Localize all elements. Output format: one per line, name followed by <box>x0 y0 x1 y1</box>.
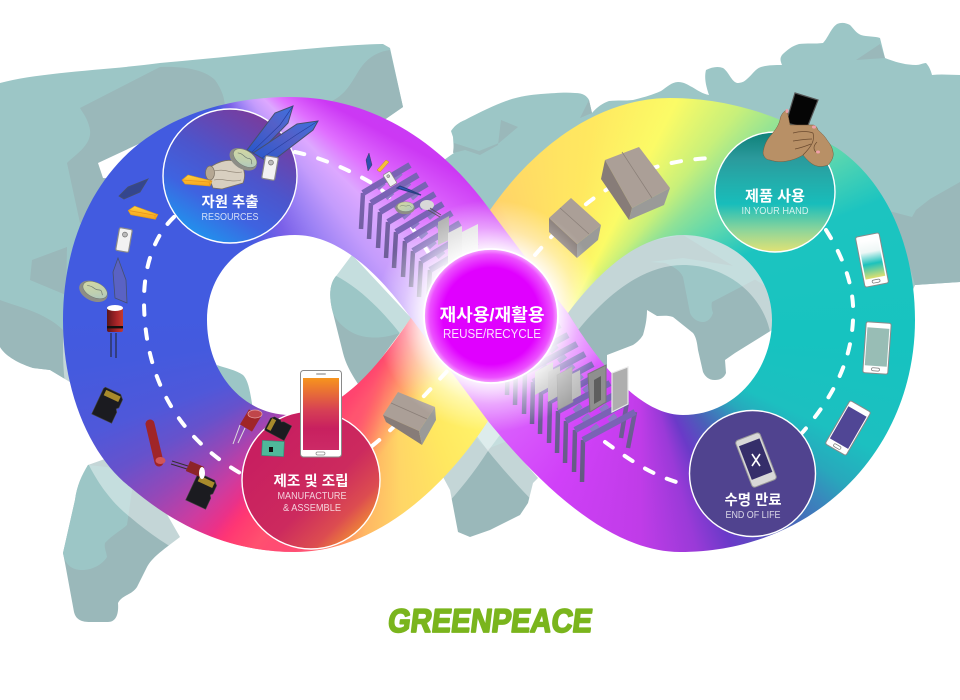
label: manufacture and assemble: MANUFACTURE <box>278 491 347 502</box>
map: asia in right hole <box>568 235 772 380</box>
map: south america <box>63 450 180 622</box>
icon: cardboard box small <box>549 198 601 258</box>
icon: discarded phone <box>735 432 777 488</box>
white glow around hub <box>385 204 596 428</box>
label: in your hand: 제품 사용 <box>745 188 805 205</box>
conveyor: lower recycling line <box>507 325 635 482</box>
icon: phone new on right <box>855 233 889 287</box>
pale band shadow on map <box>63 127 915 582</box>
icon: resources cluster (crystals, rock, log, gold, chip) <box>182 106 318 189</box>
icon: memory cards and parts <box>92 387 292 509</box>
icon: left column raw materials <box>76 179 159 306</box>
map: central america piece in left hole <box>217 255 411 410</box>
panel: end of life circle <box>690 410 816 536</box>
panel: resources circle <box>163 109 297 243</box>
band: upper right strand <box>490 98 915 320</box>
dashed route line <box>144 152 853 485</box>
label: resources: RESOURCES <box>202 212 259 223</box>
map: africa <box>442 421 538 537</box>
label: reuse recycle: REUSE/RECYCLE <box>443 327 541 341</box>
label: end of life: END OF LIFE <box>726 510 781 521</box>
band: upper left strand <box>63 97 526 339</box>
map: eurasia <box>437 23 960 320</box>
band: lower left strand <box>63 318 488 552</box>
icon: phone aged on right <box>863 322 891 374</box>
infinity loop band <box>63 97 915 552</box>
panel: reuse recycle hub <box>424 249 558 383</box>
label: reuse recycle <box>440 305 544 341</box>
panel: manufacture circle <box>242 411 380 549</box>
panel: in your hand circle <box>715 132 835 252</box>
logo: greenpeace: GREENPEACE <box>386 603 595 640</box>
icon: new smartphone <box>300 370 342 457</box>
label: resources <box>202 194 259 223</box>
items on lower line <box>535 362 628 412</box>
label: manufacture and assemble: & ASSEMBLE <box>283 503 341 514</box>
icon: hand holding phone <box>763 93 833 166</box>
label: end of life: 수명 만료 <box>724 492 782 509</box>
icon: capacitor <box>107 305 123 358</box>
conveyor: upper recycling line <box>361 153 494 326</box>
label: manufacture and assemble <box>274 473 348 514</box>
label: resources: 자원 추출 <box>202 194 258 211</box>
label: manufacture and assemble: 제조 및 조립 <box>274 473 348 490</box>
label: in your hand <box>742 188 808 217</box>
map: left continent <box>0 44 403 382</box>
label: in your hand: IN YOUR HAND <box>742 206 808 217</box>
icon: phone worn on right <box>825 400 871 456</box>
icon: cardboard box lower <box>383 392 436 445</box>
label: reuse recycle: 재사용/재활용 <box>440 305 544 325</box>
items on upper line <box>366 153 478 266</box>
icon: cardboard box large <box>601 147 670 220</box>
label: end of life <box>724 492 782 521</box>
band: lower right strand <box>450 298 915 552</box>
